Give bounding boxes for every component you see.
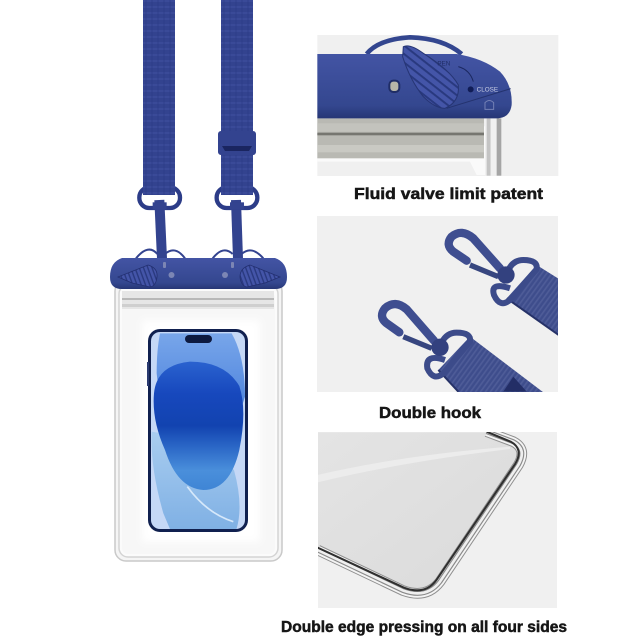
right valve	[240, 265, 280, 287]
right strap with buckle	[218, 0, 256, 195]
panel: double hook	[317, 216, 563, 392]
pressed edge lines	[318, 432, 522, 593]
close label	[468, 86, 474, 92]
panel: fluid valve: CLOSE	[477, 86, 498, 93]
left valve	[118, 265, 157, 287]
strap buckle	[218, 131, 256, 155]
vent screw	[389, 81, 399, 92]
carry handle	[367, 37, 462, 54]
blue valve bar	[317, 54, 512, 118]
upper hook	[449, 233, 563, 338]
caption: fluid valve: Fluid valve limit patent	[354, 186, 543, 203]
dial	[403, 46, 458, 108]
panel: fluid valve	[317, 35, 558, 176]
left strap	[143, 0, 175, 195]
lock icon	[485, 100, 494, 109]
dynamic island	[185, 335, 212, 343]
panel: double edge pressing	[318, 432, 557, 608]
left swivel hook	[136, 187, 185, 258]
waterproof pouch	[115, 280, 282, 561]
sheet surface	[318, 432, 523, 593]
phone screen	[150, 330, 247, 531]
zip seal	[122, 291, 274, 309]
zip seal strip	[317, 118, 501, 176]
right swivel hook	[213, 187, 263, 258]
caption: double edge pressing: Double edge pressing on all four sides	[281, 619, 567, 636]
panel: fluid valve: PEN	[437, 60, 451, 67]
caption: double hook: Double hook	[379, 405, 481, 422]
lower hook	[382, 304, 543, 392]
valve screws	[163, 262, 234, 278]
phone	[147, 329, 248, 532]
pouch header with valves	[110, 258, 287, 289]
